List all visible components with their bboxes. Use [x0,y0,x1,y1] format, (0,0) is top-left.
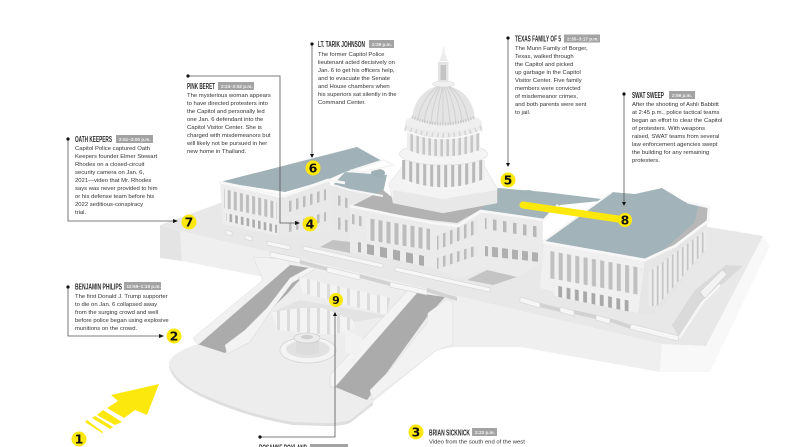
left stairs [197,265,310,353]
callout: Texas Family of 5: Texas, walked through [515,54,574,60]
plaza and central stair mass [169,258,453,423]
badge 5 [500,172,516,188]
callout: Pink Beret: one Jan. 6 defendant into the [187,117,264,123]
badge 1: 1 [75,432,83,446]
callout: SWAT Sweep: raised, SWAT teams from several [632,134,719,140]
left inner stair cheek [225,267,317,354]
callout: Texas Family of 5 [506,34,600,167]
callout: Benjamin Philips [66,282,169,338]
callout: Texas Family of 5: The Munn Family of Borger, [515,46,588,52]
callout: Pink Beret: new home in Thailand. [187,149,247,155]
badge 9: 9 [332,294,340,307]
callout: SWAT Sweep: the building for any remaining [632,150,709,156]
badge 2 [166,328,182,344]
callout: Pink Beret: to have directed protesters into [187,101,269,107]
callout: Oath Keepers: 2021—video that Mr. Rhodes [75,178,151,184]
callout: Texas Family of 5: up garbage in the Capitol [515,70,581,76]
callout: Oath Keepers: Capitol Police captured Oath [75,146,150,152]
callout: Texas Family of 5: Visitor Center. Five family [515,78,582,84]
callout: Pink Beret: the Capitol and personally led [187,109,265,115]
terrace planters [226,230,679,341]
callout: Pink Beret: PINK BERET [187,82,215,91]
callout: SWAT Sweep: of protesters. With weapons [632,126,705,132]
badge 5: 5 [504,172,512,188]
callout: SWAT Sweep [622,91,722,206]
small left cupola [371,169,385,177]
callout: Texas Family of 5: TEXAS FAMILY OF 5 [515,34,561,44]
callout: Lt. Tarik Johnson: Jan. 6 to get his officers help, [318,68,395,74]
callout: Lt. Tarik Johnson: LT. TARIK JOHNSON [318,40,365,49]
callout: SWAT Sweep: began an effort to clear the Capitol [632,118,722,124]
badge 7: 7 [185,214,193,230]
right terrace frame [672,265,743,338]
callout: SWAT Sweep: law enforcement agencies swept [632,142,718,148]
callout: Lt. Tarik Johnson: 2:29 p.m. [372,42,392,47]
dome [389,47,497,213]
callout: Oath Keepers: trial. [75,210,86,216]
terrace paved gaps [300,260,631,329]
callout: Texas Family of 5: of misdemeanor crimes, [515,94,578,100]
recess front wall [272,308,355,335]
yellow entry arrow [85,384,159,433]
callout: Brian Sicknick: Video from the south end of the west [429,440,525,446]
plaza rim [169,345,373,426]
callout: Brian Sicknick: BRIAN SICKNICK [429,428,470,438]
upper recess floor [272,300,390,322]
callout: Pink Beret: Capitol Visitor Center. She is [187,125,262,131]
callout: Pink Beret [186,74,300,225]
callout: Benjamin Philips: from the surging crowd and well [75,310,158,316]
callout: Benjamin Philips: 12:59–1:19 p.m. [126,284,161,289]
callout: Benjamin Philips: The first Donald J. Trump supporter [75,294,168,300]
callout: Texas Family of 5: members were convicted [515,86,580,92]
callout: Benjamin Philips: before police began using explosive [75,318,169,324]
portico colonnade [367,218,430,250]
portico lower windows [358,242,424,266]
right connector windows [485,218,541,238]
callout: Lt. Tarik Johnson: The former Capitol Police [318,52,385,58]
callout: Lt. Tarik Johnson [310,40,397,158]
callout: Texas Family of 5: 2:35–3:17 p.m. [567,36,599,41]
Capitol building illustration [160,47,770,426]
left connector facade [330,185,384,252]
callout: Rosanne Boyland [258,312,348,447]
badge 7 [182,214,196,230]
terrace wall [160,225,770,372]
callout: Lt. Tarik Johnson: lieutenant acted decisively on [318,60,395,66]
callout: SWAT Sweep: SWAT SWEEP [632,91,664,100]
badge 9 [329,293,343,307]
small right cupola [521,190,535,198]
light court [467,270,517,285]
callout: Oath Keepers: OATH KEEPERS [75,135,112,144]
callout: Pink Beret: The mysterious woman appears [187,93,271,99]
callout: Benjamin Philips: to die on Jan. 6 collapsed away [75,302,157,308]
badge 3 [408,424,424,440]
callout: Texas Family of 5: and both parents were sent [515,102,587,108]
fountain [280,333,336,363]
callout: SWAT Sweep: 2:59 p.m. [672,93,692,98]
callout: Lt. Tarik Johnson: and to evacuate the Senate [318,76,391,82]
callout: Oath Keepers: 2022 seditious-conspiracy [75,202,143,208]
center roof [350,190,500,223]
recess right wall [345,330,363,356]
callout: Lt. Tarik Johnson: his superiors sat silently in the [318,92,397,98]
dome base [389,167,497,213]
right inner stair cheek [330,290,417,387]
left wing [219,147,393,237]
right outer stair cheek [370,299,453,400]
callout: Texas Family of 5: the Capitol and picked [515,62,573,68]
badge 3: 3 [412,424,420,440]
badge 8: 8 [621,212,629,228]
badge 4: 4 [306,216,315,232]
yellow route to 8 [523,205,625,220]
callout: Brian Sicknick [429,428,525,446]
badge 8 [618,212,632,228]
badge 6 [306,160,320,176]
callout: SWAT Sweep: protesters. [632,158,660,164]
callout: Lt. Tarik Johnson: Command Center. [318,100,366,106]
callout: Pink Beret: 2:24–2:52 p.m. [221,84,253,89]
left outer stair cheek [193,257,290,345]
callout: Benjamin Philips: munitions on the crowd. [75,326,138,332]
number badges [72,160,632,446]
left connector roof [333,172,387,205]
callout: Oath Keepers: says was never provided to him [75,186,158,192]
right stairs [335,293,445,400]
callout: Oath Keepers: Keepers founder Elmer Stewart [75,154,158,160]
callout: Oath Keepers: 2:51–3:00 p.m. [119,137,151,142]
callout: Pink Beret: will likely not be pursued in her [186,141,267,147]
badge 4 [302,216,318,232]
callout: SWAT Sweep: at 2:45 p.m., police tactical teams [632,110,719,116]
callout: Benjamin Philips: BENJAMIN PHILIPS [75,282,122,292]
recess back wall [298,277,390,315]
badge 1 [72,432,86,446]
callout: Oath Keepers: security camera on Jan. 6, [75,170,144,176]
center block [333,185,558,285]
callout: Texas Family of 5: to jail. [515,110,531,116]
callout: Brian Sicknick: 2:23 p.m. [475,430,495,435]
terrace top [160,203,763,346]
right wing [540,188,709,313]
callout: Lt. Tarik Johnson: and House chambers when [318,84,390,90]
callout: SWAT Sweep: After the shooting of Ashli Babbitt [632,102,719,108]
callout: Pink Beret: charged with misdemeanors but [187,133,271,139]
badge 6: 6 [309,160,318,176]
right connector roof [480,188,610,220]
callout: Oath Keepers [66,135,178,223]
callout: Oath Keepers: Rhodes on a closed-circuit [75,162,145,168]
badge 2: 2 [170,328,178,344]
callout: Oath Keepers: or his defense team before his [75,194,154,200]
side of portico windows [437,219,478,250]
left court [320,240,350,253]
